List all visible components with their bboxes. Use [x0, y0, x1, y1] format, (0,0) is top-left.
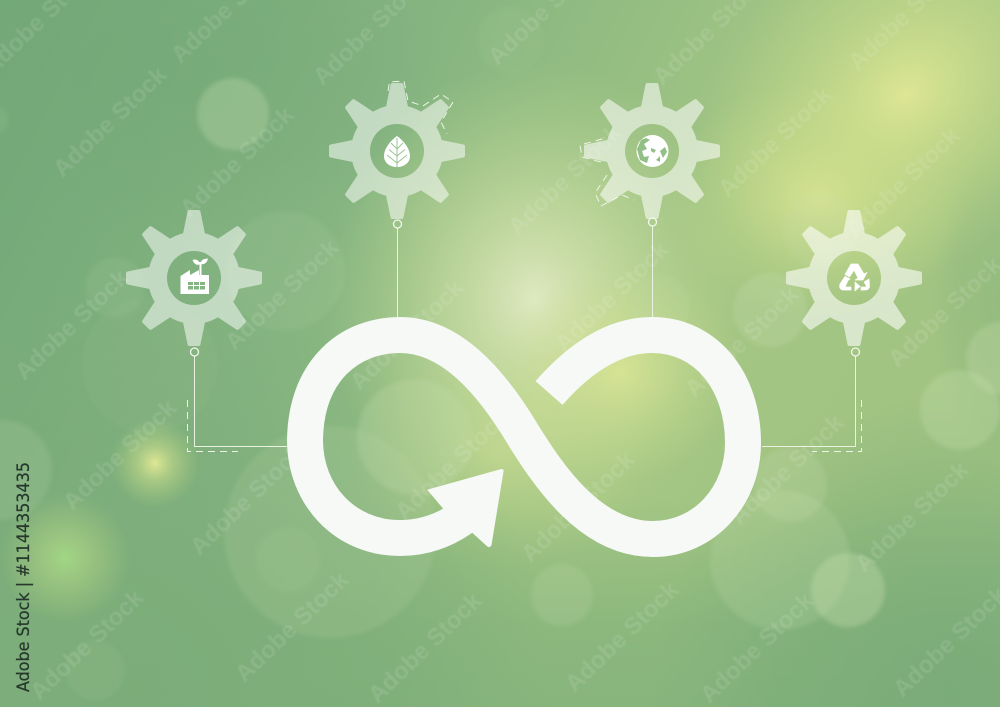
watermark pattern: Adobe Stock — [58, 394, 183, 516]
connector node — [190, 348, 198, 356]
gear: globe — [586, 85, 718, 226]
watermark pattern: Adobe Stock — [850, 456, 975, 578]
gear: recycle — [788, 212, 920, 356]
connector node — [394, 220, 402, 228]
watermark pattern: Adobe Stock — [363, 587, 488, 707]
watermark pattern: Adobe Stock — [516, 446, 641, 568]
watermark pattern: Adobe Stock — [25, 584, 150, 706]
infinity band — [305, 335, 743, 539]
watermark pattern: Adobe Stock — [230, 566, 355, 688]
connector lines — [194, 226, 856, 446]
stock id vertical text: Adobe Stock | #1144353435 — [14, 462, 34, 692]
watermark pattern: Adobe Stock — [713, 81, 838, 203]
watermark pattern: Adobe Stock — [345, 274, 470, 396]
watermark pattern: Adobe Stock — [550, 236, 675, 358]
watermark pattern: Adobe Stock — [695, 587, 820, 707]
watermark pattern: Adobe Stock — [503, 119, 628, 241]
watermark pattern: Adobe Stock — [48, 61, 173, 183]
icon: recycle arrows — [840, 264, 870, 291]
connector node — [648, 218, 656, 226]
watermark pattern: Adobe Stock — [680, 281, 805, 403]
watermark pattern: Adobe Stock — [841, 122, 966, 244]
watermark pattern: Adobe Stock — [220, 234, 345, 356]
gear: factory — [128, 212, 260, 356]
watermark pattern: Adobe Stock — [390, 404, 515, 526]
icon: factory with sprout — [180, 258, 209, 294]
watermark pattern: Adobe Stock — [725, 409, 850, 531]
arrow head — [428, 470, 503, 547]
watermark pattern: Adobe Stock — [10, 264, 135, 386]
icon: globe — [636, 135, 668, 167]
watermark pattern: Adobe Stock — [560, 576, 685, 698]
watermark pattern: Adobe Stock — [185, 439, 310, 561]
icon: leaf — [384, 136, 410, 168]
connector node — [852, 348, 860, 356]
dashed accents — [188, 81, 862, 452]
watermark pattern: Adobe Stock — [175, 101, 300, 223]
gear: leaf — [331, 85, 463, 228]
infinity arrow — [305, 335, 743, 547]
